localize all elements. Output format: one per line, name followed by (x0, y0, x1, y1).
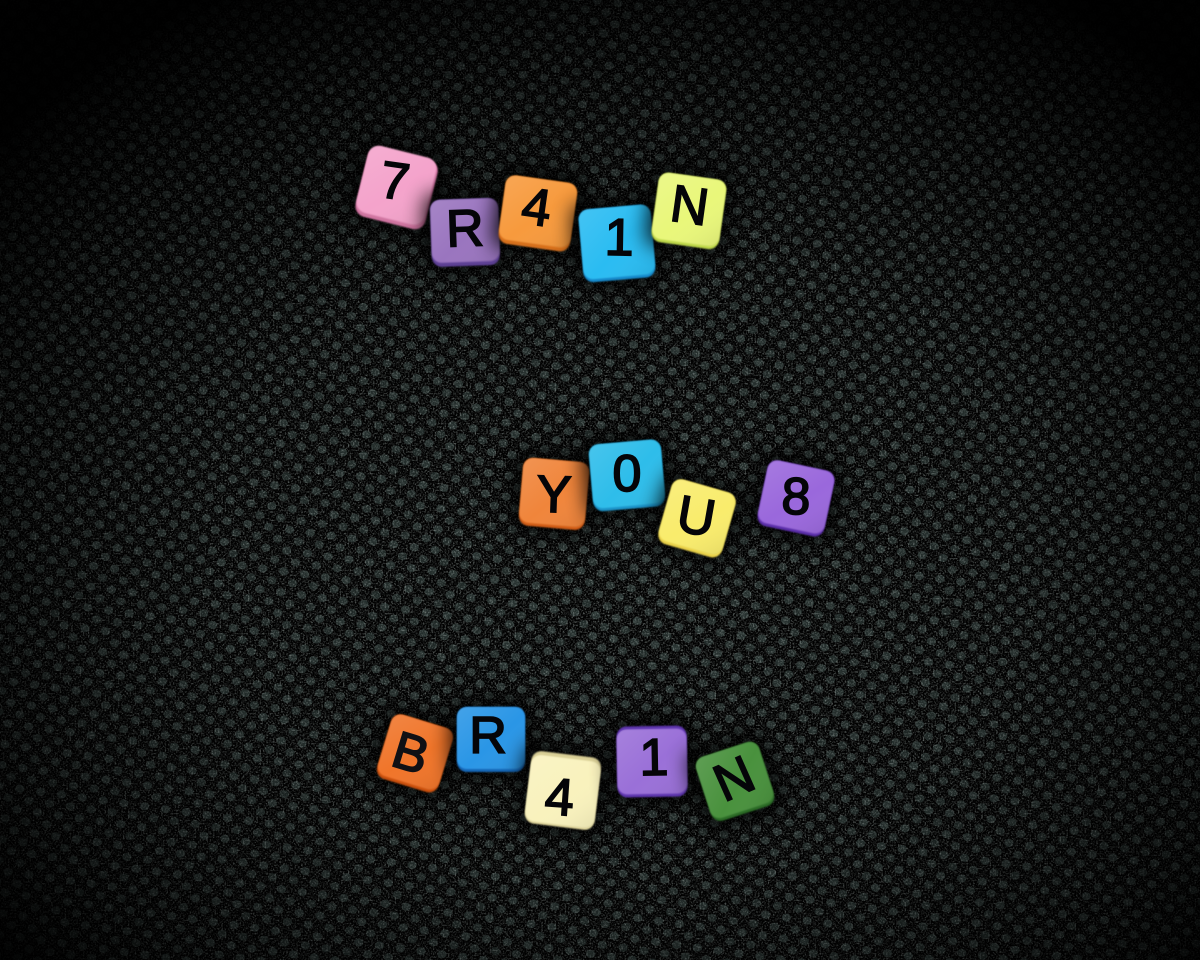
word: 7R41N (347, 138, 734, 289)
bead: 4 (491, 167, 585, 257)
bead: 4 (517, 743, 609, 837)
bead: U (649, 470, 745, 566)
bead: 1: 1 (639, 729, 669, 787)
bead: 4: 4 (518, 177, 555, 238)
bead: 1 (610, 719, 694, 803)
bead: R: R (469, 707, 507, 765)
bead: 1: 1 (604, 209, 634, 267)
bead: R: R (445, 199, 485, 259)
bead: U: U (673, 485, 720, 549)
bead: B: B (386, 721, 436, 787)
bead: 4: 4 (543, 768, 576, 828)
bead: O (582, 432, 672, 518)
bead: B (368, 706, 462, 800)
bead: 8 (749, 452, 843, 544)
bead: 1 (571, 197, 663, 289)
bead: R (451, 701, 531, 777)
bead: Y: Y (536, 465, 572, 525)
bead: 8: 8 (781, 468, 811, 526)
word: BR41N (368, 701, 785, 837)
bead: N (644, 165, 734, 255)
bead: Y (512, 452, 596, 536)
bead: 7: 7 (376, 151, 413, 212)
bead: O: 0 (613, 445, 641, 503)
word: YOU8 (512, 432, 843, 566)
bead: N: N (705, 745, 763, 813)
bead: 7 (347, 138, 447, 236)
bead: R (424, 192, 506, 272)
bead: N: N (667, 175, 712, 237)
bead: N (685, 731, 785, 831)
